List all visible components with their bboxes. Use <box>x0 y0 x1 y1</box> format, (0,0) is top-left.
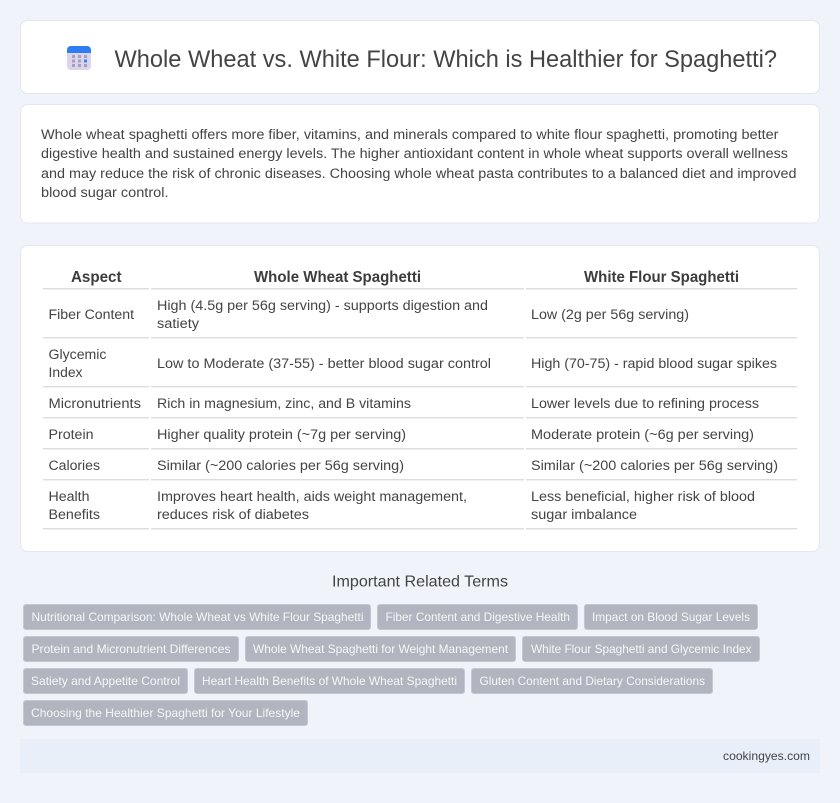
row: protein: Protein <box>48 427 94 443</box>
tag: Gluten Content and Dietary Considerations <box>480 674 705 688</box>
intro text panel <box>20 104 820 223</box>
row: health benefits: Improves heart health, aids weight management, <box>157 489 467 505</box>
row: micronutrients <box>43 396 797 418</box>
related term tags <box>24 604 760 726</box>
table header row: Whole Wheat Spaghetti <box>254 269 421 286</box>
tag <box>24 604 370 630</box>
tag: White Flour Spaghetti and Glycemic Index <box>531 642 752 656</box>
row: micronutrients: Rich in magnesium, zinc, and B vitamins <box>157 396 411 412</box>
footer source: cookingyes.com <box>723 749 810 763</box>
row: micronutrients: Micronutrients <box>48 396 141 412</box>
tag: Satiety and Appetite Control <box>31 674 180 688</box>
row: micronutrients: Lower levels due to refining process <box>531 396 759 412</box>
tag: Fiber Content and Digestive Health <box>386 610 570 624</box>
intro paragraph: and may reduce the risk of chronic diseases. Choosing whole wheat pasta contributes to a balanced diet and improved <box>41 166 796 182</box>
table header row <box>43 269 797 289</box>
row: calories <box>43 458 797 480</box>
row: calories: Similar (~200 calories per 56g serving) <box>157 458 404 474</box>
row: fiber content: Low (2g per 56g serving) <box>531 307 689 323</box>
tag <box>522 636 760 662</box>
tag <box>584 604 758 630</box>
intro paragraph: blood sugar control. <box>41 185 168 201</box>
row: health benefits: Benefits <box>48 507 100 523</box>
row: calories: Calories <box>48 458 100 474</box>
tag: Heart Health Benefits of Whole Wheat Spaghetti <box>202 674 457 688</box>
row: glycemic index: Glycemic <box>48 347 106 363</box>
tag: Impact on Blood Sugar Levels <box>592 610 750 624</box>
row: fiber content: satiety <box>157 316 200 332</box>
title: Whole Wheat vs. White Flour: Which is Healthier for Spaghetti? <box>114 46 777 73</box>
row: health benefits: Health <box>48 489 90 505</box>
tag <box>24 668 188 694</box>
tag: Nutritional Comparison: Whole Wheat vs White Flour Spaghetti <box>32 610 364 624</box>
row: glycemic index: High (70-75) - rapid blood sugar spikes <box>531 356 777 372</box>
intro paragraph <box>41 127 796 201</box>
row: glycemic index <box>43 347 797 387</box>
row: calories: Similar (~200 calories per 56g serving) <box>531 458 778 474</box>
row: fiber content: High (4.5g per 56g serving) - supports digestion and <box>157 298 488 314</box>
intro paragraph: digestive health and sustained energy levels. The higher antioxidant content in whole wheat supports overall wellness <box>41 146 788 162</box>
footer <box>20 739 820 773</box>
heading: important related terms: Important Related Terms <box>332 574 508 590</box>
tag <box>472 668 712 694</box>
row: health benefits <box>43 489 797 529</box>
icon: calendar <box>67 46 91 70</box>
row: protein: Higher quality protein (~7g per serving) <box>157 427 406 443</box>
comparison table panel <box>20 246 820 552</box>
row: health benefits: sugar imbalance <box>531 507 637 523</box>
row: fiber content <box>43 298 797 338</box>
row: glycemic index: Low to Moderate (37-55) - better blood sugar control <box>157 356 491 372</box>
row: protein <box>43 427 797 449</box>
table header row: White Flour Spaghetti <box>584 269 739 286</box>
tag <box>24 700 308 726</box>
tag <box>246 636 516 662</box>
table header row: Aspect <box>71 269 122 286</box>
row: health benefits: reduces risk of diabetes <box>157 507 309 523</box>
tag: Whole Wheat Spaghetti for Weight Management <box>253 642 509 656</box>
tag <box>194 668 464 694</box>
header panel <box>20 20 820 94</box>
row: glycemic index: Index <box>48 365 82 381</box>
tag <box>24 636 238 662</box>
row: fiber content: Fiber Content <box>48 307 134 323</box>
intro paragraph: Whole wheat spaghetti offers more fiber, vitamins, and minerals compared to white flour spaghetti, promoting better <box>41 127 779 143</box>
tag: Protein and Micronutrient Differences <box>32 642 231 656</box>
row: health benefits: Less beneficial, higher risk of blood <box>531 489 755 505</box>
row: protein: Moderate protein (~6g per serving) <box>531 427 754 443</box>
tag: Choosing the Healthier Spaghetti for Your Lifestyle <box>31 706 300 720</box>
tag <box>378 604 578 630</box>
